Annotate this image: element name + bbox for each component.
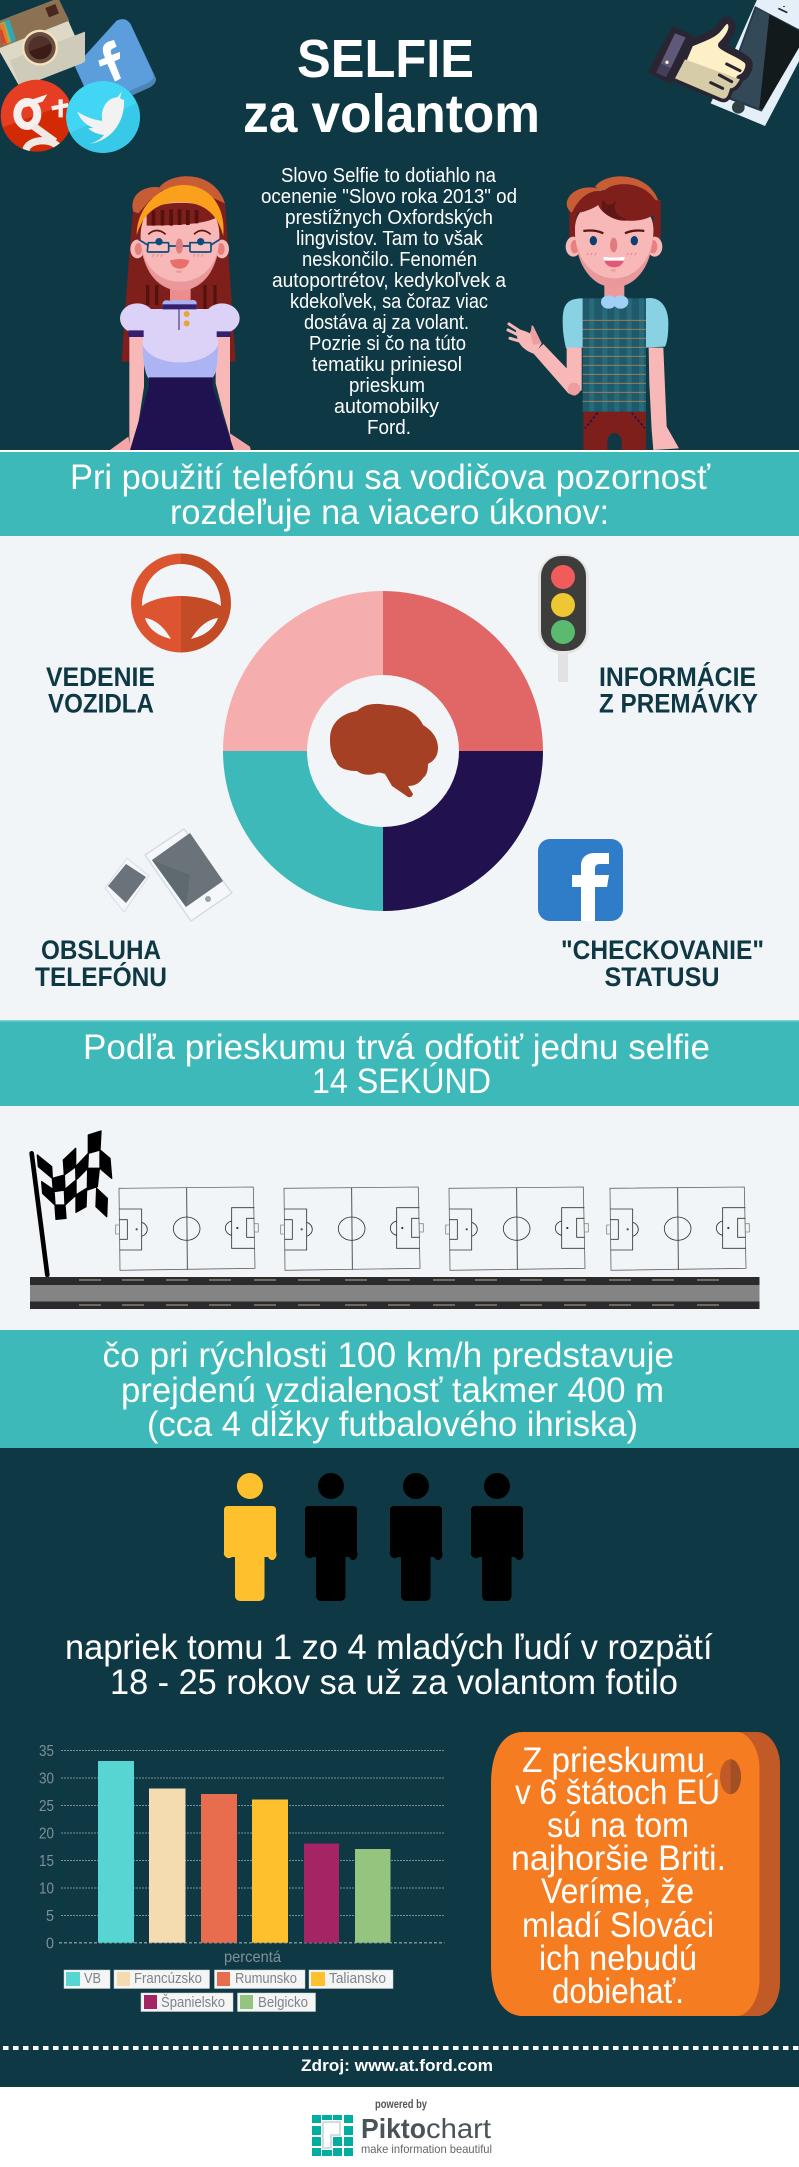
- text block: intro: [261, 164, 517, 439]
- icon: football pitch 4: [607, 1187, 749, 1270]
- panel: header: [0, 0, 799, 450]
- label: vedenie vozidla: [46, 662, 155, 718]
- title: [243, 29, 540, 144]
- icon: steering wheel: [131, 554, 231, 652]
- icon: google plus badge: [0, 80, 70, 152]
- legend: Francúzsko: [134, 1970, 202, 1987]
- icon: checkered flag: [32, 1131, 112, 1275]
- illustration: boy: [508, 176, 679, 450]
- callout text: najhoršie Briti.: [511, 1839, 726, 1878]
- axis labels: 25: [39, 1798, 54, 1815]
- icon: social media cluster: [0, 0, 156, 161]
- callout text: ich nebudú: [539, 1939, 697, 1978]
- panel: heading attention: Pri použití telefónu sa vodičova pozornosť: [70, 458, 711, 497]
- text block: intro: prestížnych Oxfordských: [285, 206, 493, 229]
- chart: attention donut: [223, 591, 543, 911]
- callout text: sú na tom: [547, 1806, 689, 1845]
- person highlighted: [224, 1473, 276, 1601]
- panel: distance illustration: [0, 1106, 799, 1330]
- icon: football pitch 1: [116, 1187, 258, 1270]
- axis labels: 15: [39, 1853, 54, 1870]
- text block: intro: kdekoľvek, sa čoraz viac: [290, 290, 488, 313]
- panel: heading distance: (cca 4 dĺžky futbalového ihriska): [147, 1404, 638, 1444]
- text block: intro: ocenenie "Slovo roka 2013" od: [261, 185, 517, 208]
- legend: VB: [84, 1970, 101, 1987]
- callout text: mladí Slováci: [522, 1906, 714, 1945]
- panel: footer: [0, 2087, 799, 2167]
- source: Zdroj: www.at.ford.com: [301, 2056, 493, 2075]
- wordmark: make information beautiful: [361, 2142, 492, 2156]
- legend: Taliansko: [329, 1970, 386, 1987]
- text block: intro: neskončilo. Fenomén: [302, 248, 477, 271]
- label: obsluha telefonu: TELEFÓNU: [35, 961, 167, 992]
- bars: [98, 1761, 390, 1943]
- text block: one in four: napriek tomu 1 zo 4 mladých ľudí v rozpätí: [65, 1628, 713, 1667]
- icon: facebook tile: [75, 19, 156, 110]
- icon: road: [30, 1277, 760, 1309]
- scroll hole: [720, 1759, 741, 1794]
- axis labels: 35: [39, 1743, 54, 1760]
- panel: heading distance: [0, 1330, 799, 1448]
- callout text: dobiehať.: [552, 1972, 684, 2011]
- icon: people 1 in 4: [224, 1473, 523, 1601]
- text block: intro: automobilky: [334, 395, 440, 418]
- illustration: girl: [110, 176, 251, 450]
- callout text: v 6 štátoch EÚ: [515, 1773, 720, 1812]
- text block: intro: dostáva aj za volant.: [304, 311, 469, 334]
- callout text: Veríme, že: [541, 1872, 694, 1911]
- axis labels: 30: [39, 1770, 54, 1788]
- axis labels: 20: [39, 1826, 54, 1842]
- legend: Španielsko: [161, 1994, 225, 2011]
- axis labels: [39, 1743, 54, 1952]
- panel: heading 14 seconds: Podľa prieskumu trvá odfotiť jednu selfie: [83, 1028, 710, 1067]
- label: checkovanie statusu: STATUSU: [604, 962, 720, 992]
- panel: heading attention: rozdeľuje na viacero úkonov:: [170, 493, 609, 532]
- title: za volantom: [243, 84, 540, 144]
- icon: brain: [330, 704, 438, 797]
- text block: intro: Pozrie si čo na túto: [309, 332, 466, 355]
- white divider: [0, 450, 799, 452]
- icon: football pitch 2: [281, 1187, 423, 1270]
- callout: orange scroll: [491, 1732, 780, 2016]
- legend: [64, 1970, 393, 2012]
- text block: intro: prieskum: [349, 374, 425, 397]
- text block: intro: Ford.: [367, 416, 411, 439]
- callout text: Z prieskumu: [522, 1741, 705, 1780]
- panel: heading distance: prejdenú vzdialenosť takmer 400 m: [121, 1371, 664, 1410]
- label: checkovanie statusu: "CHECKOVANIE": [561, 935, 764, 965]
- axis labels: 0: [46, 1936, 54, 1952]
- icon: football pitch 3: [446, 1187, 588, 1270]
- text block: one in four: 18 - 25 rokov sa už za volantom fotilo: [110, 1663, 678, 1702]
- text block: intro: autoportrétov, kedykoľvek a: [272, 269, 507, 292]
- label: checkovanie statusu: [561, 935, 764, 992]
- label: vedenie vozidla: VOZIDLA: [48, 688, 154, 718]
- icon: piktochart logo: [312, 2115, 353, 2156]
- powered by: powered by: [375, 2097, 427, 2111]
- panel: heading distance: čo pri rýchlosti 100 km/h predstavuje: [102, 1336, 674, 1375]
- chart: percentages by country: [39, 1743, 444, 2012]
- label: informacie z premavky: INFORMÁCIE: [599, 661, 756, 692]
- panel: survey results: [0, 1448, 799, 2087]
- label: vedenie vozidla: VEDENIE: [46, 662, 155, 692]
- text block: one in four: [65, 1628, 713, 1702]
- panel: attention donut: [0, 536, 799, 1020]
- text block: intro: Slovo Selfie to dotiahlo na: [281, 164, 497, 187]
- label: informacie z premavky: Z PREMÁVKY: [599, 688, 758, 718]
- icon: instagram camera: [0, 0, 85, 87]
- label: informacie z premavky: [599, 661, 758, 718]
- wordmark: chart: [426, 2113, 491, 2144]
- text block: intro: tematiku priniesol: [312, 353, 462, 376]
- callout text: [511, 1741, 726, 2011]
- label: obsluha telefonu: [35, 935, 167, 992]
- wordmark: Pikto: [361, 2113, 426, 2144]
- icon: thumbs up with phone: [650, 0, 799, 126]
- icon: phones: [105, 829, 232, 921]
- panel: heading 14 seconds: [0, 1020, 799, 1106]
- legend: Rumunsko: [235, 1970, 297, 1987]
- text block: intro: lingvistov. Tam to však: [296, 227, 484, 250]
- icon: twitter badge: [66, 81, 140, 153]
- panel: heading attention: [0, 452, 799, 536]
- panel: heading 14 seconds: 14 SEKÚND: [312, 1062, 491, 1101]
- axis title: percentá: [224, 1949, 281, 1966]
- icon: facebook square: [538, 839, 623, 921]
- axis labels: 5: [46, 1908, 54, 1925]
- label: obsluha telefonu: OBSLUHA: [41, 935, 161, 965]
- legend: Belgicko: [258, 1994, 308, 2011]
- wordmark: [361, 2113, 492, 2156]
- axis labels: 10: [39, 1880, 54, 1898]
- icon: traffic light: [538, 554, 589, 682]
- title: SELFIE: [297, 29, 474, 89]
